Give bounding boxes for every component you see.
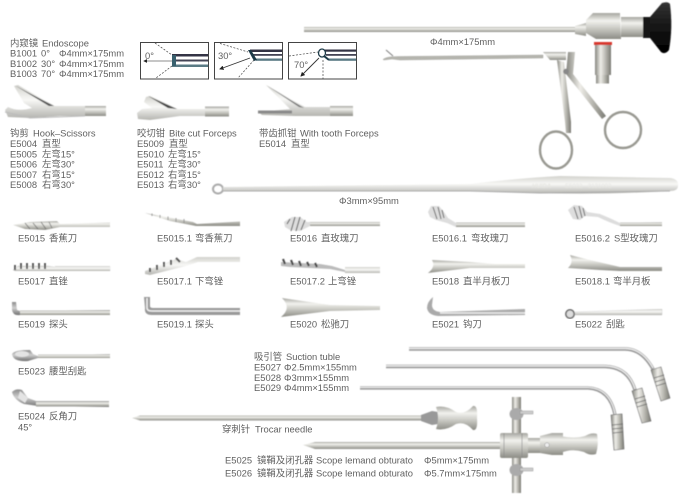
text: bite cut forceps list: E5013 [137, 179, 164, 190]
text: sheath E5025: Φ5mm×175mm [424, 454, 489, 466]
item: E5016.1: E5016.1 [432, 232, 467, 244]
item: E5015 [13, 221, 110, 244]
endoscope list text: Φ4mm×175mm [59, 58, 124, 69]
text: suction tube list: E5027 [254, 362, 281, 372]
text: hook scissors list: 左弯15° [42, 148, 75, 160]
icon: hook scissors [5, 85, 106, 118]
item: E5020: 松驰刀 [321, 318, 349, 330]
panel: 70 degree view: 70° [294, 59, 308, 70]
icon: endoscope [304, 2, 671, 84]
item: E5017.1 [145, 257, 240, 286]
text: trocar needle label: Trocar needle [255, 424, 312, 434]
icon: bite cut forceps [137, 96, 229, 120]
text: hook scissors list: 右弯30° [42, 179, 75, 190]
text: toothed forceps: E5014 [259, 138, 286, 149]
endoscope list text: B1002 [10, 58, 37, 69]
text: trocar needle label: 穿刺针 [222, 424, 250, 434]
item: E5017 [13, 263, 110, 286]
endoscope list text: 70° [41, 68, 55, 79]
icon: toothed forceps [258, 85, 353, 116]
panel: 70 degree view [288, 42, 356, 79]
item: E5015: 香蕉刀 [49, 232, 77, 244]
text: hook scissors list: Hook–Scissors [33, 128, 96, 138]
text: bite cut forceps list: 左弯30° [168, 158, 201, 170]
text: bite cut forceps list: E5012 [137, 169, 164, 180]
text: bite cut forceps list: E5011 [137, 158, 163, 170]
item: E5021 [427, 297, 525, 330]
item: E5017.1: E5017.1 [157, 276, 192, 286]
item: E5016: 直玫瑰刀 [321, 232, 359, 244]
item: E5016.1: 弯玫瑰刀 [471, 232, 509, 244]
item: E5019.1 [144, 297, 240, 330]
item: E5016.1 [428, 206, 525, 244]
endoscope list text: Φ4mm×175mm [59, 68, 124, 79]
endoscope list text: Endoscope [42, 38, 89, 48]
icon: suction tube 2 [386, 366, 651, 423]
text: hook scissors list: E5006 [10, 158, 37, 170]
text: toothed forceps [259, 128, 379, 149]
item: E5015.1: 弯香蕉刀 [195, 232, 233, 244]
text: bite cut forceps list: 咬切钳 [137, 128, 165, 138]
text: suction tube list [254, 351, 357, 393]
text: sheath E5026: 镜鞘及闭孔器 [257, 468, 314, 478]
text: suction tube list: Φ2.5mm×155mm [284, 362, 357, 372]
item: E5017.2: 上弯锉 [328, 276, 357, 286]
panel: 30 degree view [214, 42, 282, 79]
item: E5015.1: E5015.1 [157, 232, 192, 244]
text: suction tube list: Φ4mm×155mm [284, 382, 349, 393]
icon: spatula probe: 3131002 [588, 184, 612, 190]
item: E5016.2: E5016.2 [575, 232, 610, 244]
item: E5017: E5017 [18, 276, 45, 286]
item: E5020: E5020 [290, 318, 317, 330]
dimension label: spatula: Φ3mm×95mm [339, 195, 399, 206]
item: E5024: E5024 [18, 410, 45, 422]
endoscope list text: B1001 [10, 48, 37, 58]
text: bite cut forceps list: Bite cut Forceps [169, 128, 237, 138]
endoscope list text: 0° [41, 48, 50, 58]
icon: scope sheath and obturator [303, 397, 598, 493]
panel: 0 degree view [140, 42, 208, 79]
item: E5018: E5018 [432, 276, 459, 286]
item: E5016 [284, 217, 380, 244]
text: hook scissors list: E5004 [10, 138, 37, 149]
item: E5022: 刮匙 [606, 318, 625, 330]
text: bite cut forceps list: 右弯15° [168, 169, 201, 180]
text: bite cut forceps list: 右弯30° [168, 179, 201, 190]
item: E5016.2: S型玫瑰刀 [614, 232, 658, 244]
item: E5017.1: 下弯锉 [195, 276, 224, 286]
item: E5018.1: 弯半月板 [613, 276, 651, 286]
endoscope list text [10, 38, 124, 79]
text: sheath E5025: E5025 [225, 454, 252, 466]
item: E5023: 腰型刮匙 [49, 366, 87, 376]
icon: suction tube 1 [409, 348, 670, 401]
endoscope list text: B1003 [10, 68, 37, 79]
text: hook scissors list: E5005 [10, 148, 37, 160]
item: E5017.2: E5017.2 [290, 276, 325, 286]
item: E5015: E5015 [18, 232, 45, 244]
item: E5022 [566, 309, 662, 330]
icon: spatula probe: E5022 [565, 184, 583, 190]
panel: 30 degree view: 30° [218, 50, 232, 61]
text: suction tube list: Suction tuble [286, 351, 340, 362]
item: E5020 [281, 298, 380, 330]
endoscope list text: 内窥镜 [10, 38, 38, 48]
item: E5018: 直半月板刀 [463, 276, 510, 286]
item: E5021: E5021 [432, 318, 459, 330]
text: suction tube list: E5028 [254, 372, 281, 383]
text: hook scissors list: 直型 [42, 138, 61, 149]
item: E5024: 反角刀 [49, 410, 77, 422]
text: sheath E5025: 镜鞘及闭孔器 [257, 454, 314, 466]
text: sheath E5026: Scope lemand obturato [316, 468, 413, 478]
item: E5019.1: 探头 [195, 318, 214, 330]
item: E5018.1 [568, 255, 662, 286]
item: E5022: E5022 [575, 318, 602, 330]
item: E5019: E5019 [18, 318, 45, 330]
item: E5015.1 [145, 213, 240, 244]
text: bite cut forceps list: E5010 [137, 148, 164, 160]
icon: spatula probe: HUIDA [532, 184, 551, 190]
item: E5019 [12, 302, 110, 330]
text: suction tube list: 吸引管 [254, 351, 282, 362]
icon: spatula probe [213, 176, 678, 194]
text: bite cut forceps list: E5009 [137, 138, 164, 149]
text: hook scissors list: 钩剪 [10, 128, 29, 138]
text: hook scissors list: E5007 [10, 169, 37, 180]
text: hook scissors list: 左弯30° [42, 158, 75, 170]
text: sheath E5026: E5026 [225, 468, 252, 478]
item: E5019: 探头 [49, 318, 68, 330]
item: E5017: 直锉 [49, 276, 68, 286]
item: E5016.2 [568, 205, 662, 244]
endoscope list text: 30° [41, 58, 55, 69]
text: sheath E5026: Φ5.7mm×175mm [424, 468, 497, 478]
text: bite cut forceps list: 左弯15° [168, 148, 201, 160]
text: hook scissors list: E5008 [10, 179, 37, 190]
text: hook scissors list [10, 128, 96, 190]
icon: ear forceps with ring handles [383, 50, 641, 168]
text: toothed forceps: 带齿抓钳 [259, 128, 297, 138]
text: suction tube list: E5029 [254, 382, 281, 393]
panel: 0 degree view: 0° [145, 50, 154, 61]
text: bite cut forceps list [137, 128, 237, 190]
item: E5018.1: E5018.1 [575, 276, 610, 286]
item: E5017.2 [281, 259, 380, 286]
text: toothed forceps: With tooth Forceps [300, 128, 379, 138]
item: E5019.1: E5019.1 [157, 318, 192, 330]
text: sheath E5025: Scope lemand obturato [316, 454, 413, 466]
text: toothed forceps: 直型 [291, 138, 310, 149]
icon: trocar needle [132, 406, 477, 430]
text: bite cut forceps list: 直型 [169, 138, 188, 149]
icon: suction tube 3 [360, 388, 624, 450]
dimension label: endoscope: Φ4mm×175mm [430, 36, 495, 47]
text: suction tube list: Φ3mm×155mm [284, 372, 349, 383]
item: E5023 [12, 350, 110, 376]
item: E5016: E5016 [290, 232, 317, 244]
item: E5023: E5023 [18, 366, 45, 376]
endoscope list text: Φ4mm×175mm [59, 48, 124, 58]
item: E5018 [428, 260, 525, 286]
item: E5024: 45° [18, 422, 32, 432]
item: E5024 [12, 389, 109, 432]
text: hook scissors list: 右弯15° [42, 169, 75, 180]
item: E5021: 钩刀 [463, 318, 482, 330]
